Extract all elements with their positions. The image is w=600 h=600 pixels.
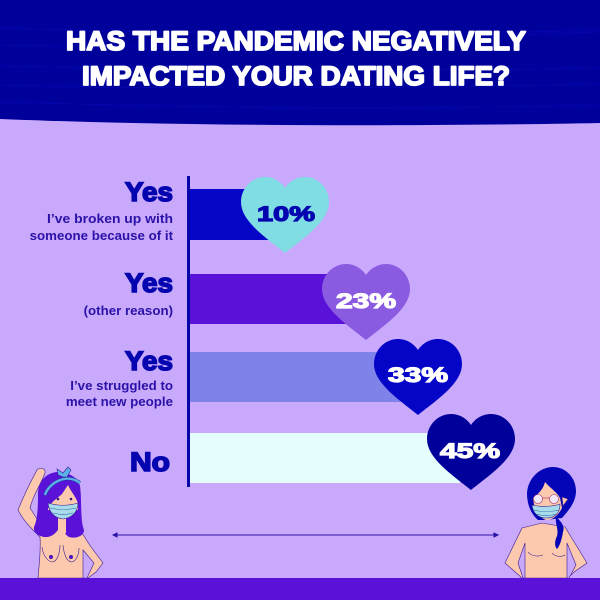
row 4 label: No <box>130 447 170 477</box>
row 1 label <box>30 177 174 243</box>
figure: right woman <box>505 467 587 578</box>
heart: 10% <box>241 177 329 253</box>
row 3 label: I’ve struggled to <box>70 378 173 393</box>
bar: 23% <box>190 274 350 324</box>
row 3 label <box>66 346 173 409</box>
heart: 33%: 33% <box>388 364 448 387</box>
title: HAS THE PANDEMIC NEGATIVELY <box>66 26 526 56</box>
title: IMPACTED YOUR DATING LIFE? <box>82 61 510 91</box>
bar: 33% <box>190 352 405 402</box>
title <box>66 26 526 91</box>
row 1 label: I’ve broken up with <box>47 211 173 226</box>
bar: 10% <box>190 189 270 240</box>
heart: 33% <box>374 339 462 415</box>
row 2 label: (other reason) <box>84 303 173 318</box>
heart: 23%: 23% <box>336 290 396 313</box>
row 1 label: someone because of it <box>30 228 174 243</box>
header banner <box>0 0 600 125</box>
vertical axis <box>187 176 190 487</box>
row 2 label <box>84 268 173 318</box>
figure: left woman <box>18 467 103 578</box>
row 1 label: Yes <box>125 177 173 207</box>
double arrow <box>113 533 498 537</box>
row 2 label: Yes <box>125 268 173 298</box>
row 3 label: Yes <box>125 346 173 376</box>
bottom band <box>0 578 600 600</box>
bar: 45% <box>190 433 460 483</box>
heart: 10%: 10% <box>257 203 315 226</box>
row 3 label: meet new people <box>66 394 173 409</box>
heart: 23% <box>322 264 410 340</box>
heart: 45% <box>427 414 515 490</box>
heart: 45%: 45% <box>440 440 500 463</box>
